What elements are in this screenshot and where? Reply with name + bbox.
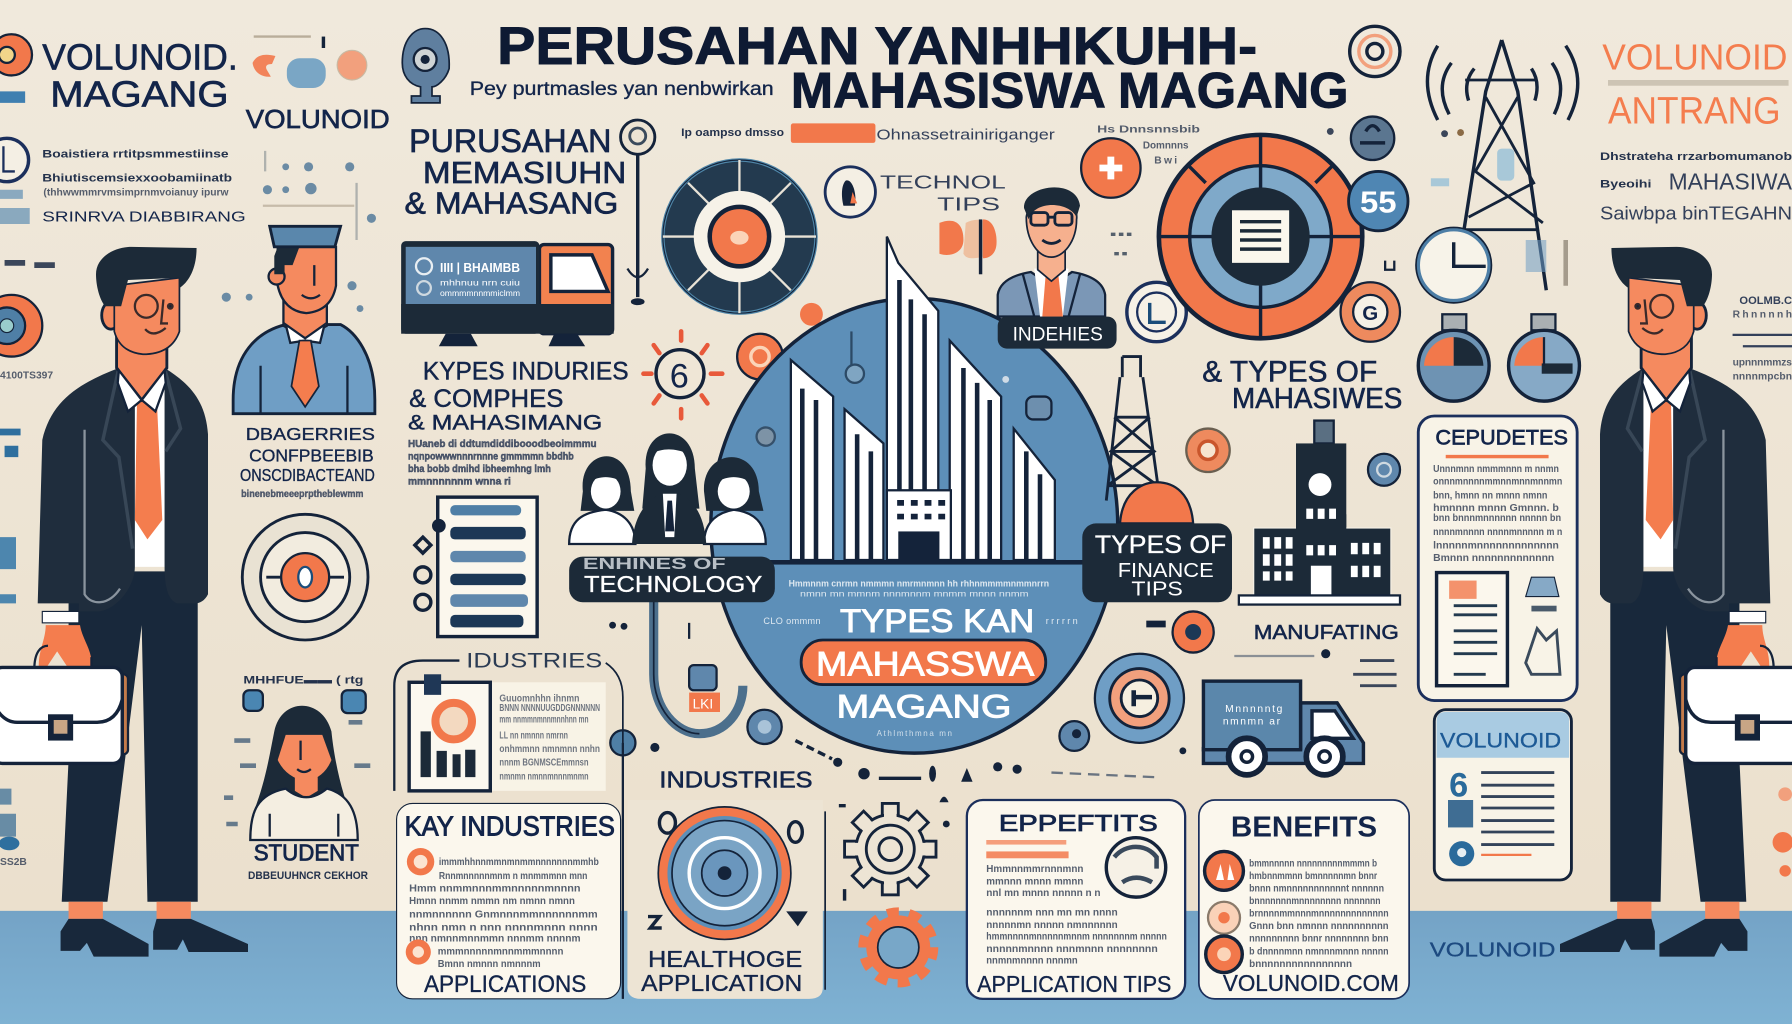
clipboard list xyxy=(415,497,537,637)
heading: purusahan: MEMASIUHN xyxy=(423,155,626,190)
neck xyxy=(283,291,327,338)
heading: kypes indurie: bha bobb dmihd ibheemhng lmh xyxy=(408,464,551,475)
head xyxy=(278,247,336,313)
body text: Bmnnn nnnnnnnnnnnnn xyxy=(1433,553,1554,564)
panel title: BENEFITS xyxy=(1231,812,1377,844)
student caption: DBBEUUHNCR CEKHOR xyxy=(248,870,368,882)
label: indehies xyxy=(998,317,1117,349)
shoes xyxy=(61,919,248,957)
heading: types of mahasiwes xyxy=(1202,356,1402,415)
panel: volunoid card xyxy=(1434,710,1571,880)
small caption right xyxy=(1097,125,1200,166)
circle band line xyxy=(745,560,1088,565)
hand xyxy=(39,625,92,669)
radio tower xyxy=(1427,40,1578,290)
right text block: MAHASIWA xyxy=(1669,169,1792,195)
badge 55: 55 xyxy=(1360,185,1397,220)
neck xyxy=(117,337,167,400)
gear outline xyxy=(845,803,936,895)
main title: PERUSAHAN YANHHKUHH- xyxy=(497,17,1257,76)
body text: hmnnnn mnnn Gmnnn. b xyxy=(1433,503,1559,514)
heading: idustries: IDUSTRIES xyxy=(466,647,602,672)
shirt xyxy=(119,368,165,567)
body text: nnnnnnnnn bnnr nnnnnnnn bnn xyxy=(1249,934,1389,945)
eyes and mouth xyxy=(135,295,173,333)
label: technology: ENHINES OF xyxy=(583,556,726,573)
body text: Hmnn nnmm nmmn nm nmnn nmnn xyxy=(409,896,575,907)
main tower xyxy=(887,237,938,560)
panel: industries chart: mm nnmmnmnnmnnhnn mn xyxy=(499,714,589,725)
left text block: Bhiutiscemsiexxoobamiinatb xyxy=(42,173,232,185)
panel: benefits xyxy=(1199,800,1409,999)
heading: purusahan: PURUSAHAN xyxy=(409,123,611,159)
left text block: SRINRVA DIABBIRANG xyxy=(42,210,246,226)
blue cargo truck xyxy=(1203,681,1363,775)
label: types of finance tips: FINANCE xyxy=(1118,559,1214,582)
panel: key industries xyxy=(397,803,621,999)
blue shirt employee xyxy=(233,226,375,414)
circular dial xyxy=(663,160,816,313)
body text: Gnnn bnn nmnnn nnnnnnnnnn xyxy=(1249,921,1389,932)
panel: volunoid card: VOLUNOID xyxy=(1440,727,1561,752)
pipe with lock icon xyxy=(654,601,743,734)
ring icons right of circle xyxy=(747,429,1400,751)
panel title: CEPUDETES xyxy=(1435,425,1568,450)
icons xyxy=(1205,851,1243,973)
body text: nnnnnmn nnnnn nmnnnnnn xyxy=(986,920,1118,931)
torso xyxy=(233,325,375,414)
panel: industries chart: BNNN NNNNUUGDDGNNNNNN xyxy=(499,703,600,714)
right edge notes: Rhnnnnh xyxy=(1733,310,1792,321)
manufacturing notes xyxy=(1234,649,1397,686)
panel: efficiency tips xyxy=(967,800,1185,999)
body text: hmbnnmmnn bmnnnnnmn bnnr xyxy=(1249,871,1377,882)
tie xyxy=(135,394,162,539)
oil tower xyxy=(1106,357,1160,501)
body text xyxy=(1433,464,1562,564)
body text: bnnn nmnnnnnnnnnnnt nnnnnn xyxy=(1249,883,1384,894)
panel title: KAY INDUSTRIES xyxy=(405,810,615,841)
blue cargo truck: nmnmn ar xyxy=(1223,717,1281,728)
cuff xyxy=(42,611,79,623)
side panel frame xyxy=(622,743,624,999)
badge 55 xyxy=(1349,171,1408,231)
delivery truck with screen: IIII | BHAIMBB xyxy=(440,261,520,275)
right text block: Saiwbpa binTEGAHN xyxy=(1600,202,1792,223)
cap xyxy=(270,226,341,247)
collar xyxy=(118,370,166,411)
label: indehies: INDEHIES xyxy=(1013,324,1103,346)
central circle xyxy=(711,298,1118,753)
body text: nhnn nmn n nnn nnnnmnnn nnnn xyxy=(409,922,598,933)
head icon top xyxy=(402,29,449,103)
employee caption: DBAGERRIES xyxy=(246,424,375,444)
panel: industries chart: onhmmnn nmnmnn nnhn xyxy=(499,744,600,755)
decorative dots xyxy=(222,151,376,312)
pipe with lock icon: LKI xyxy=(693,697,713,712)
body text: mmnnn mnnn mmnn xyxy=(986,877,1083,888)
body text: nnnnnnm nnn mn mn nnnn xyxy=(986,907,1118,918)
icon xyxy=(1106,838,1166,897)
delivery truck with screen xyxy=(401,241,614,346)
left edge icons xyxy=(0,34,55,868)
circle small text xyxy=(763,578,1078,626)
trousers xyxy=(62,571,198,902)
orange half badge xyxy=(1120,482,1193,523)
orange bar with caption: Ohnassetrainiriganger xyxy=(877,127,1055,143)
building far right xyxy=(1014,429,1055,560)
label: types of finance tips: TYPES OF xyxy=(1095,531,1226,559)
three women students xyxy=(569,433,766,544)
body text: b dnnnnmnn nmnnnmnnn nnnnn xyxy=(1249,946,1389,957)
panel title: EPPEFTITS xyxy=(999,810,1158,836)
building right xyxy=(950,341,1001,560)
heading: kypes indurie xyxy=(408,357,629,488)
student area: MHHFUE▬▬ ( rtg xyxy=(243,674,363,686)
orange pill label xyxy=(801,640,1046,685)
body text: Unnnmnn nmmmnnn m nnmn xyxy=(1433,464,1559,475)
main title: MAHASISWA MAGANG xyxy=(791,61,1349,118)
circle heading: magang: MAGANG xyxy=(837,689,1011,725)
employee caption: CONFPBEEBIB xyxy=(249,446,374,466)
subtitle: Pey purtmasles yan nenbwirkan xyxy=(470,78,774,100)
number six icon xyxy=(643,331,722,418)
right edge notes: upnnnmmzs xyxy=(1733,358,1792,369)
body text: mmmnnnnnmnnmmmnnnn xyxy=(438,946,563,957)
document xyxy=(1437,573,1507,686)
left text block: Boaistiera rrtitpsmmestiinse xyxy=(42,149,229,161)
body text: immmhhnnmmnmnmmnnnnnnnmmhb xyxy=(439,857,599,868)
circle footnote: Athlmthmna mn xyxy=(877,729,952,738)
badge circle c xyxy=(1127,282,1186,342)
right edge notes xyxy=(1733,295,1792,877)
small caption right: Hs Dnnsnnsbib xyxy=(1097,125,1200,136)
label: types of finance tips xyxy=(1082,523,1232,602)
orange pill label: MAHASSWA xyxy=(816,645,1034,683)
big donut xyxy=(1159,135,1362,338)
circle small text: Hmmnnm cnrmn nmmmn nmrmnmnn hh rhhnmmmmnmmnrrn xyxy=(789,578,1050,588)
right text block: Byeoihi xyxy=(1600,178,1651,190)
label: technology xyxy=(569,556,775,602)
left edge icons: 4100TS397 xyxy=(0,370,53,381)
body text: bnn bnnnmnnnnnn nnnnn bn xyxy=(1433,513,1561,524)
body text: nnn nmnnmnnmmn nnnmm nnnnm xyxy=(409,934,581,945)
main title xyxy=(497,17,1349,118)
heading: volunoid: VOLUNOID xyxy=(246,104,390,134)
left edge icons: SS2B xyxy=(0,857,27,868)
number six icon: 6 xyxy=(670,357,689,395)
tech tips icon xyxy=(825,167,875,217)
central low block xyxy=(887,490,951,560)
socks xyxy=(69,902,191,919)
circle small text: rrrrrn xyxy=(1046,616,1078,626)
list lines xyxy=(1481,773,1554,845)
face xyxy=(114,278,179,354)
blurry tower details xyxy=(1431,149,1566,286)
heading: manufating: MANUFATING xyxy=(1254,621,1399,644)
jacket xyxy=(38,368,208,611)
side ornaments xyxy=(648,813,805,928)
badge g: G xyxy=(1362,302,1378,325)
footer: APPLICATION TIPS xyxy=(977,971,1171,997)
collar and tie xyxy=(286,325,325,343)
orange dot badges xyxy=(737,303,823,379)
footer: APPLICATIONS xyxy=(424,971,586,998)
body text: Rnnmnnnnnmnm n mnmmmnn mnn xyxy=(439,871,587,882)
left text block xyxy=(42,149,246,226)
heading: kypes indurie: nqnpowwwnnnrnnne gmmmmn bbdhb xyxy=(408,451,574,462)
student caption xyxy=(248,840,368,882)
wall clock xyxy=(1416,227,1491,303)
circle small text: CLO ommmn xyxy=(763,616,821,626)
pole icon xyxy=(621,120,655,305)
building left xyxy=(845,409,883,560)
businessman with glasses xyxy=(998,187,1105,317)
school building xyxy=(1239,421,1400,605)
body text: nnnnmnnnn nnnnmnnnnn m n xyxy=(1433,527,1562,538)
gear orange xyxy=(864,913,933,982)
heading: purusahan: & MAHASANG xyxy=(405,186,618,221)
student area xyxy=(224,674,370,840)
panel: industries chart: nnnm BGNMSCEmmnsn xyxy=(499,758,589,769)
highlight bars xyxy=(986,840,1069,858)
right edge notes: nnnnmpcbn xyxy=(1733,371,1792,382)
body text: lnnnnnmnnnnnnnnnnnnn xyxy=(1433,541,1559,552)
hair xyxy=(96,247,197,306)
heading: types of mahasiwes: & TYPES OF xyxy=(1202,356,1377,389)
blue cargo truck: Mnnnnntg xyxy=(1225,704,1283,715)
heading: purusahan xyxy=(405,123,626,221)
heading: kypes indurie: & MAHASIMANG xyxy=(408,410,602,435)
body text: bnnnnnnnmnnnnnnnn nnnnnnn xyxy=(1249,896,1381,907)
building far left xyxy=(791,360,833,560)
ear xyxy=(102,302,120,329)
circle heading: types kan: TYPES KAN xyxy=(840,603,1034,639)
panel labels: HEALTHOGE xyxy=(648,946,802,972)
right text block: Dhstrateha rrzarbomumanob xyxy=(1600,151,1792,163)
heading: kypes indurie: mmnnnnnnm wnna ri xyxy=(408,477,511,488)
employee caption xyxy=(240,424,375,500)
footer: VOLUNOID.COM xyxy=(1223,970,1399,996)
target icon xyxy=(658,807,791,939)
body text: hmmnnnnmnnnnnmnnm nnnnnnnm nnnnn xyxy=(986,931,1167,942)
badge g xyxy=(1341,282,1400,342)
body text xyxy=(409,857,599,970)
panel: industries chart xyxy=(394,661,623,791)
small icons xyxy=(1526,577,1560,674)
body text: nnmnnnnnn Gnmnnnmmnnnnnnmm xyxy=(409,910,598,921)
heading right: volunoid: ANTRANG xyxy=(1608,89,1781,131)
student caption: STUDENT xyxy=(254,840,359,866)
body text: Hmmnnmmrnnnmnn xyxy=(986,864,1083,875)
body text: Hmm nnmmnnnmmnnnnnmnnnn xyxy=(409,883,581,894)
scattered marks xyxy=(609,128,1464,901)
right edge notes: OOLMB.C xyxy=(1739,295,1792,307)
body text: nnmnmnnnn nnnmn xyxy=(986,955,1078,966)
body text: bnnnnnnnnnnnnnnnn xyxy=(1249,959,1352,970)
skyline buildings xyxy=(791,237,1055,560)
top left small icons xyxy=(253,37,367,88)
label: types of finance tips: TIPS xyxy=(1131,577,1183,600)
heading: volunoid magang xyxy=(42,37,238,114)
heading: volunoid magang: MAGANG xyxy=(50,73,229,114)
body text: bnn, hmnn nn mnnn nmnn xyxy=(1433,490,1547,501)
top target xyxy=(1350,26,1400,77)
circle small text: nmnn mn mmnm nnnmnnm mnmm mnnn nnmm xyxy=(800,590,1029,599)
plus badge xyxy=(1081,138,1141,198)
tech tips text: TIPS xyxy=(937,193,1000,214)
small caption right: Domnnns xyxy=(1143,141,1189,152)
key ring icon xyxy=(1095,654,1184,743)
body text: nnnnnmnnnn nnnmnnn nnnnnnnn xyxy=(986,944,1158,955)
pie gauges xyxy=(1418,314,1579,401)
panel: healthcare application xyxy=(627,800,825,999)
body text xyxy=(986,864,1167,966)
panel: healthcare application: APPLICATION xyxy=(641,970,802,996)
list numbers: 6 xyxy=(1449,767,1468,805)
body text: bmmnnnnn nnnnnnnnnmmmn b xyxy=(1249,858,1377,869)
small caption right: Bwi xyxy=(1154,155,1177,166)
heading: kypes indurie: KYPES INDURIES xyxy=(423,357,629,385)
panel: industries chart: Guuomnhhn ihnmn xyxy=(499,694,579,705)
label: technology: TECHNOLOGY xyxy=(584,571,762,597)
tech tips text xyxy=(880,172,1006,214)
heading: types of mahasiwes: MAHASIWES xyxy=(1232,383,1402,415)
circle small icons xyxy=(757,331,1051,446)
panel: industries chart: LL nn nmnnn nmrnn xyxy=(499,730,568,741)
left text block: (thhwwmmrvmsimprnmvoianuy ipurw xyxy=(43,187,229,198)
target emblem xyxy=(242,514,368,640)
heading: kypes indurie: HUaneb di ddtumdiddibooodbeoimmmu xyxy=(408,439,597,450)
body text: Bmnn nmnnn nmnnnm xyxy=(438,959,541,970)
heading right: volunoid: VOLUNOID xyxy=(1602,37,1787,78)
delivery truck with screen: ommmmnnmmiclmm xyxy=(440,289,520,298)
icon xyxy=(407,848,434,875)
tech tips text: TECHNOL xyxy=(880,172,1006,193)
body text: brnnnnmmnnnmnnnnnnnnnnnnn xyxy=(1249,909,1389,920)
body text: nnl mn mnnn nnnnn n n xyxy=(986,888,1101,899)
briefcase xyxy=(0,646,128,763)
heading right: volunoid xyxy=(1602,37,1789,131)
man left with briefcase xyxy=(0,247,248,957)
heading: kypes indurie: & COMPHES xyxy=(409,385,563,413)
employee caption: ONSCDIBACTEAND xyxy=(240,465,375,485)
body text xyxy=(1249,858,1389,970)
orange bar with caption xyxy=(681,123,1055,143)
heading: industries: INDUSTRIES xyxy=(659,766,813,792)
lapel details xyxy=(103,368,181,549)
speech bubble icon xyxy=(939,219,997,274)
heading: volunoid magang: VOLUNOID. xyxy=(42,37,238,78)
floor band xyxy=(0,911,1792,1024)
icon xyxy=(406,939,431,965)
floor brand label: VOLUNOID xyxy=(1430,939,1555,962)
employee caption: binenebmeeeprptheblewmm xyxy=(241,489,363,500)
right text block xyxy=(1600,151,1792,223)
man right with briefcase xyxy=(1560,247,1792,957)
face badge xyxy=(1351,117,1394,160)
body text: onnnmnnnnmmnnmnnmnnmn xyxy=(1433,477,1562,488)
delivery truck with screen: mhhnuu nrn cuiu xyxy=(440,279,520,288)
panel: industries chart: nmnmn nmnnmnnnmnmn xyxy=(499,771,589,782)
orange bar with caption: Ip oampso dmsso xyxy=(681,127,784,139)
list numbers xyxy=(1448,767,1474,866)
panel: cepudetes xyxy=(1418,416,1577,701)
